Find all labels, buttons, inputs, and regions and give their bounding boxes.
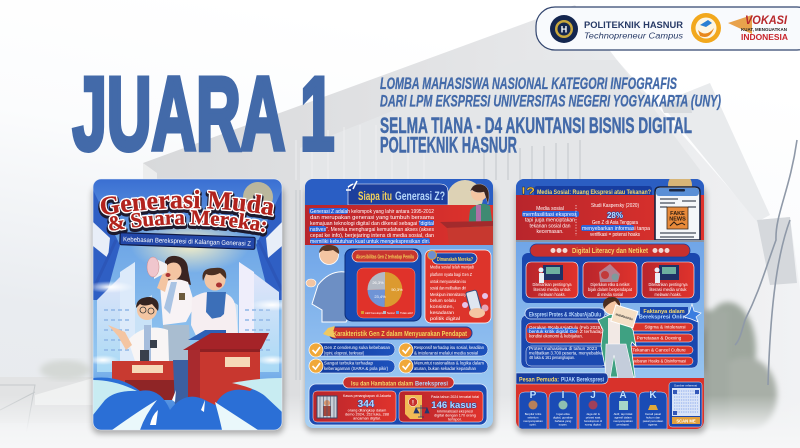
card: A: A — [619, 390, 627, 401]
campus name: Technopreneur Campus — [584, 30, 684, 40]
stat card: 344 arrests: 344 — [358, 399, 375, 410]
card: K: K — [649, 390, 657, 401]
stat card: 344 arrests: demo 2024, 152 luka, 288 — [345, 412, 389, 416]
character: girl with megaphone — [147, 256, 195, 362]
heading: protests — [525, 308, 605, 319]
heading: social media: !? — [521, 184, 535, 201]
icon: phone with fake news: NEWS — [669, 216, 686, 222]
panel: where are they: konsisten, — [430, 304, 454, 309]
heading: challenges: Berekspresi Online — [639, 314, 689, 320]
card: A: pendapat. — [617, 422, 630, 426]
icon: phone in hand — [462, 290, 488, 318]
heading: PIJAK: Pesan Pemuda: — [519, 376, 559, 384]
item: open to diversity: keberagaman (SARA & pola pikir) — [324, 366, 388, 371]
heading: PIJAK — [516, 373, 608, 384]
card: P: menyampaikan — [523, 419, 543, 423]
light flares — [86, 281, 294, 365]
panel: issues and obstacles — [309, 377, 487, 425]
panel: where are they: sosial dan melibatkan diri — [430, 286, 466, 290]
character: boy in blue sweater — [306, 244, 348, 322]
panel: definition: kemajuan teknologi digital dan dikenal sebagai "digital — [310, 221, 434, 227]
panel: social media text: Studi Kaspersky (2020) — [591, 203, 639, 209]
cover title: & Suara Mereka: — [108, 208, 268, 234]
icon: prisoner behind bars — [317, 396, 337, 418]
card: J — [579, 390, 607, 429]
QR code panel: Sumber referensi — [674, 384, 697, 388]
card: P: P — [530, 390, 537, 401]
panel: definition: dan merupakan generasi yang tumbuh bersama — [310, 215, 434, 221]
pie chart — [367, 272, 403, 307]
panel: pie chart card — [345, 249, 421, 321]
waves — [93, 378, 282, 430]
card: A: agresif dalam — [614, 416, 632, 420]
panel: poster page 3 — [516, 173, 704, 429]
card: J: J — [590, 390, 596, 401]
card: J: berekspresi di — [584, 419, 602, 423]
panel: where are they: politik digital — [430, 316, 460, 321]
panel: definition: cepat ke info), berjejaring intens di media sosial, dan — [310, 233, 434, 239]
card: I: bahasa yang — [555, 419, 572, 423]
cover subtitle ribbon — [120, 233, 255, 249]
stat card: 344 arrests: ancaman digital. — [353, 416, 381, 420]
character: boy with glasses — [108, 297, 169, 361]
competition description — [380, 74, 721, 110]
card: I: digital, gunakan — [553, 416, 574, 420]
panel: definition: Generasi Z adalah kelompok yang lahir antara 1995-2012 — [310, 209, 434, 215]
card shadows — [92, 186, 706, 434]
heading: digital literacy — [530, 244, 690, 257]
card: ethics and netiquette — [583, 262, 637, 298]
heading: social media: Media Sosial: Ruang Ekspresi atau Tekanan? — [537, 189, 651, 196]
chart legend: Netral — [387, 311, 395, 315]
panel: social media text: Media sosial — [536, 206, 564, 212]
chart legend — [361, 311, 413, 314]
character: boy at podium — [188, 268, 238, 340]
left podium — [112, 361, 174, 400]
text block: student protest: 48 luka & 161 penangkapan. — [529, 355, 575, 360]
stat card: 344 arrests — [313, 391, 396, 422]
card: P: opini. — [530, 422, 537, 426]
card: J: ruang digital. — [585, 422, 601, 426]
cover title: & Suara Mereka: — [106, 210, 268, 237]
card: A: Aktif, tapi tidak — [614, 412, 633, 416]
pie chart: 23,4% — [374, 294, 386, 299]
cover title: & Suara Mereka: — [109, 210, 266, 232]
card: ethics and netiquette: Diperlukan etika & netiket — [590, 282, 630, 287]
stat card: 146 cases: terlapor. — [448, 418, 462, 422]
icon: Vokasi Indonesia logo: VOKASI — [745, 13, 788, 27]
item: rationality: Menuntut rasionalitas & logika dalam — [414, 360, 484, 366]
card: K — [639, 390, 667, 429]
heading: issues: Isu dan Hambatan dalam — [351, 380, 413, 388]
item: open expression: Gen Z cenderung suka kebebasan — [324, 345, 390, 350]
icon: phone with fake news — [655, 187, 700, 240]
icon: megaphone — [147, 257, 167, 279]
card: media literacy: Ditekankan pentingnya — [532, 282, 572, 287]
chart legend: Tidak aktif — [400, 311, 413, 315]
panel: social media text: 28% — [607, 211, 623, 220]
card: hoax literacy: Ditekankan pentingnya — [648, 282, 688, 287]
card: J: privasi saat — [586, 416, 601, 420]
heading: challenges: Faktanya dalam — [643, 309, 685, 315]
card: P: sebelum — [528, 416, 539, 420]
panel: where are they: Media sosial telah menjadi — [430, 264, 474, 270]
card: A — [609, 390, 637, 429]
card: K: Kenali pasal — [645, 412, 661, 416]
list: challenges: Penyebaran Hoaks & Disinformasi — [626, 358, 686, 364]
icon: Vokasi Indonesia logo: INDONESIA — [741, 33, 788, 42]
character: student with sign — [598, 297, 638, 379]
panel: poster cover — [93, 179, 282, 430]
panel: pie chart card: Aksesibilitas Gen Z terhadap Pemilu — [356, 254, 414, 260]
city buildings — [93, 190, 282, 372]
heading: Siapa itu Generasi Z?: Generasi Z? — [395, 191, 445, 203]
panel: definition: memiliki kebutuhan kuat untuk mengekspresikan diri. — [310, 239, 430, 245]
panel: social media text: tekanan sosial dan — [530, 224, 571, 230]
stat card: 146 cases: digital dengan 170 orang — [434, 414, 476, 418]
panel: PIJAK message — [516, 373, 704, 429]
card: P: Berpikir kritis — [525, 412, 542, 416]
card: I — [549, 390, 577, 429]
card: media literacy — [526, 262, 578, 298]
winner name and institution: POLITEKNIK HASNUR — [380, 132, 517, 158]
icon: Politeknik Hasnur crest: H — [561, 24, 567, 34]
list: challenges: Perretasan & Doxxing — [637, 336, 682, 340]
heading: challenges — [639, 307, 689, 320]
stat card: 146 cases: 146 kasus — [431, 400, 477, 411]
pie chart: 26,3% — [372, 280, 384, 285]
cover title: Generasi Muda — [100, 190, 273, 216]
panel: social media text: menyebarkan informasi tanpa — [582, 226, 650, 232]
item: social response: Responsif terhadap isu sosial, keadilan — [414, 345, 484, 350]
heading: Siapa itu Generasi Z?: Siapa itu — [358, 191, 392, 203]
stat card: 146 cases: Pada tahun 2024 tercatat total — [431, 395, 479, 399]
panel: where are they: Meskipun intensitasnya — [430, 292, 468, 297]
cover subtitle ribbon: Kebebasan Berekspresi di Kalangan Generasi Z — [123, 236, 251, 248]
QR code panel — [669, 382, 702, 427]
card: ethics and netiquette: di media sosial — [597, 292, 623, 297]
text block: student protest — [526, 346, 607, 366]
card: ethics and netiquette: bijak dalam berpendapat — [588, 287, 633, 292]
item: open to diversity: Sangat terbuka terhadap — [324, 360, 373, 366]
title: JUARA 1: JUARA 1 — [72, 56, 334, 172]
heading: Siapa itu Generasi Z? — [346, 181, 448, 205]
panel: where are they: platform nyata bagi Gen Z — [430, 272, 472, 277]
card: hoax literacy: melawan hoaks. — [654, 292, 682, 297]
character: speaker at podium — [440, 184, 493, 245]
heading: characteristics — [323, 326, 472, 339]
chart legend: Aktif berekspresi — [365, 311, 386, 315]
stat card: 146 cases — [399, 391, 483, 422]
panel: where are they: untuk menyuarakan isu — [430, 279, 466, 284]
heading: characteristics: Karakteristik Gen Z dalam Menyuarakan Pendapat — [333, 331, 468, 338]
text block: student protest: melibatkan 3.700 peserta, menyebabkan — [529, 350, 606, 356]
item: open expression — [309, 343, 395, 357]
card: J: Jaga diri & — [586, 412, 600, 416]
panel: social media text: kecemasan. — [536, 229, 564, 235]
heading: social media — [522, 186, 652, 195]
card: I: Ingat etika — [556, 412, 570, 416]
heading: PIJAK: PIJAK Berekspresi — [561, 376, 604, 384]
card: hoax literacy: literasi media untuk — [650, 287, 687, 292]
card: K: pasal penodaan — [643, 419, 664, 423]
icon: phone with fake news: FAKE — [670, 211, 685, 217]
panel: protests and challenges — [521, 304, 701, 368]
stat card: 146 cases: kriminalisasi ekspresi — [437, 410, 473, 414]
cover title: Generasi Muda — [98, 190, 276, 220]
icon: Vokasi Indonesia logo — [728, 13, 788, 42]
heading: digital literacy: Digital Literacy dan Netiket — [572, 248, 649, 255]
panel: social media text: tapi juga menciptakan — [525, 218, 575, 224]
panel: where are they: kesadaran — [430, 310, 454, 315]
panel: where are they: belum selalu — [430, 298, 456, 303]
text block: #KaburAjaDulu: Gerakan #KaburAjaDulu (Feb 2025), — [529, 325, 603, 330]
highlights — [309, 208, 434, 244]
item: social response — [399, 343, 488, 357]
item: rationality — [399, 359, 488, 373]
panel: where are they — [425, 250, 491, 323]
list: challenges — [612, 323, 693, 365]
text block: student protest: Protes mahasiswa di tahun 2023 — [529, 346, 598, 351]
card: P — [519, 390, 547, 429]
stat card: 344 arrests: orang ditangkap dalam — [348, 408, 386, 412]
card: media literacy: literasi media untuk — [534, 287, 571, 292]
text block: #KaburAjaDulu — [526, 323, 607, 343]
heading: issues: Berekspresi — [415, 380, 448, 388]
panel: social media text: Gen Z di Asia Tenggara — [592, 220, 638, 226]
list: challenges: Stigma & Intoleransi — [644, 324, 686, 330]
panel: poster page 2 — [305, 179, 493, 428]
cover title — [98, 188, 276, 237]
tree — [700, 302, 777, 435]
sign: #KABURAJADULU — [615, 312, 633, 321]
heading: issues — [343, 377, 454, 388]
stat card: 344 arrests: Kasus penangkapan di Jakarta — [343, 394, 391, 398]
card: K: hukum dan — [646, 416, 661, 420]
text block: #KaburAjaDulu: kondisi ekonomi & kebijakan. — [529, 334, 583, 338]
campus name — [584, 20, 684, 40]
panel: where are they: Dimanakah Mereka? — [437, 257, 473, 263]
panel: social media text — [516, 195, 704, 240]
item: rationality: aturan, bukan sekadar kepatuhan — [414, 366, 476, 371]
panel: social media text: verifikasi = potensi hoaks — [590, 232, 640, 238]
QR code panel: SCAN ME — [676, 418, 696, 424]
card: I: I — [562, 390, 565, 401]
icon: Vokasi Indonesia logo: KUAT, MENGUATKAN — [741, 27, 787, 32]
panel: social media text: memfasilitasi ekspresi, — [522, 212, 578, 218]
logo bar — [536, 7, 800, 50]
icon: document with scales: ! — [412, 400, 414, 406]
cover title: Generasi Muda — [99, 188, 274, 217]
card: I: sopan. — [559, 422, 568, 426]
heading: protests: Ekspresi Protes & #KaburAjaDulu — [529, 312, 601, 318]
panel: definition — [305, 205, 493, 245]
card: hoax literacy — [642, 262, 694, 298]
right podium — [183, 333, 269, 408]
card: A: menyampaikan — [613, 419, 633, 423]
panel: digital literacy — [522, 244, 700, 303]
card: media literacy: melawan hoaks. — [538, 292, 566, 297]
item: social response: & intoleransi melalui media sosial — [414, 350, 478, 356]
item: open to diversity — [309, 359, 395, 373]
card: K: agama. — [648, 422, 658, 426]
text block: #KaburAjaDulu: bentuk kritik digital Gen Z terhadap — [529, 329, 604, 334]
campus name: POLITEKNIK HASNUR — [584, 20, 683, 30]
icon: Diktisaintek Berdampak badge — [691, 13, 721, 43]
pie chart: 50,3% — [391, 287, 403, 292]
item: open expression: (opini, ekspresi, berkreasi) — [324, 350, 364, 356]
list: challenges: Tekanan & Cancel Culture — [632, 348, 686, 352]
panel: definition: natives". Mereka menghargai kemudahan akses (akses — [310, 227, 435, 233]
winner name and institution — [380, 113, 692, 158]
icon: Politeknik Hasnur crest — [550, 15, 578, 43]
icon: blue star — [684, 304, 701, 322]
